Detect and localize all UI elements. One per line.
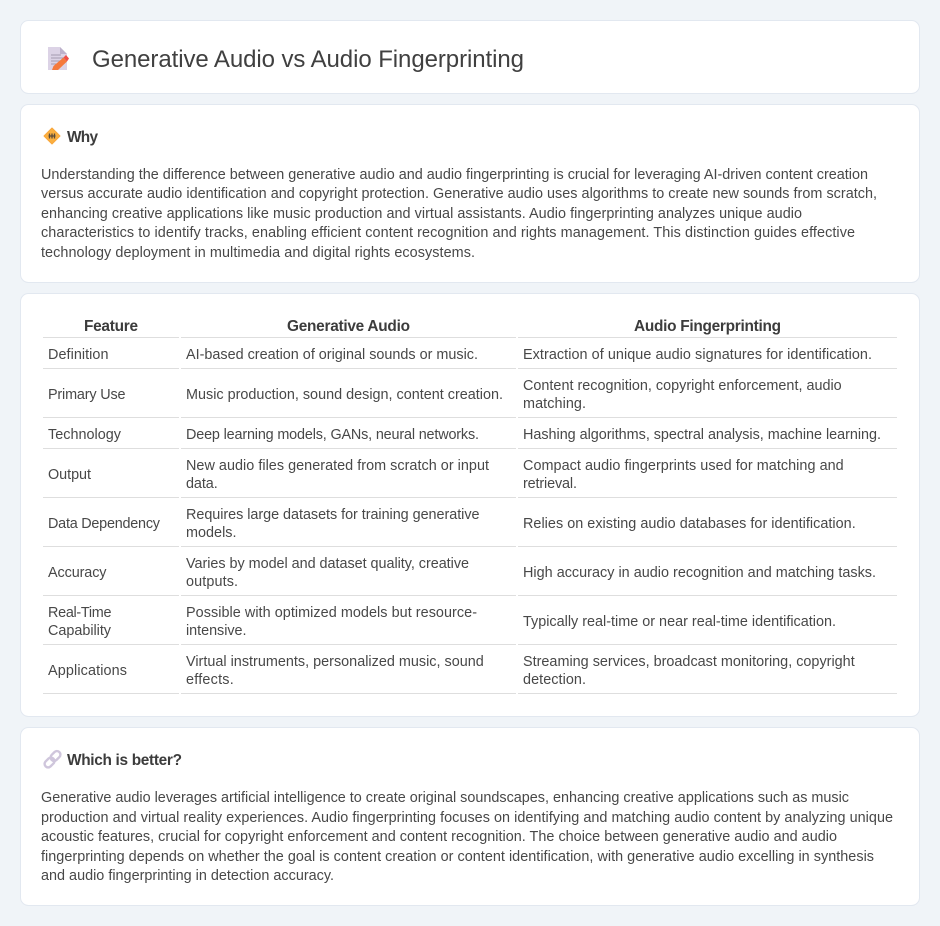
icon: link [43, 750, 62, 769]
row: data dependency: Requires large datasets for training generative [186, 507, 480, 523]
row: real-time capability: Real-Time [48, 605, 112, 621]
row: real-time capability: Possible with optimized models but resource- [186, 605, 477, 621]
row: real-time capability: Typically real-time or near real-time identification. [523, 614, 836, 630]
row: technology: Deep learning models, GANs, neural networks. [186, 427, 479, 443]
row: primary use: Music production, sound design, content creation. [186, 387, 503, 403]
row: output: data. [186, 476, 218, 492]
icon: warning diamond [44, 128, 60, 144]
heading: why: Why [67, 129, 98, 146]
row: data dependency [48, 507, 856, 541]
title: Generative Audio vs Audio Fingerprinting [92, 46, 524, 73]
row: real-time capability: Capability [48, 623, 112, 639]
icon: document with pencil [48, 47, 69, 70]
text block: which is better paragraph: acoustic features, crucial for copyright enforcement and content recognition. The choice between generative audio and audio [41, 829, 837, 845]
row: output: New audio files generated from scratch or input [186, 458, 489, 474]
panel: which is better [20, 728, 920, 906]
panel: comparison table [20, 294, 920, 716]
text block: why paragraph: characteristics to identify tracks, enabling efficient content recognition and rights management. This distinction guides effective [41, 225, 855, 241]
row: definition [48, 347, 872, 363]
row: applications: effects. [186, 672, 234, 688]
text block: which is better paragraph: and audio fingerprinting in detection accuracy. [41, 868, 334, 884]
row: accuracy: outputs. [186, 574, 238, 590]
row: output: Output [48, 467, 91, 483]
text block: which is better paragraph: production and virtual reality experiences. Audio fingerprinting focuses on identifying and matching audio content by analyzing unique [41, 810, 893, 826]
row: real-time capability: intensive. [186, 623, 246, 639]
table header row: Feature [84, 318, 138, 335]
text block: why paragraph: Understanding the difference between generative audio and audio fingerprinting is crucial for leveraging AI-driven content creation [41, 167, 868, 183]
row: applications: Virtual instruments, personalized music, sound [186, 654, 484, 670]
row: primary use: Content recognition, copyright enforcement, audio [523, 378, 842, 394]
row: output: Compact audio fingerprints used for matching and [523, 458, 844, 474]
table header row: Generative Audio [287, 318, 410, 335]
row: data dependency: Relies on existing audio databases for identification. [523, 516, 856, 532]
text block: which is better paragraph [41, 790, 893, 884]
heading: which is better: Which is better? [67, 752, 182, 769]
row: data dependency: models. [186, 525, 236, 541]
row: output [48, 458, 844, 492]
row: applications: Applications [48, 663, 127, 679]
row: output: retrieval. [523, 476, 577, 492]
text block: why paragraph: enhancing creative applications like music production and virtual assistants. Audio fingerprinting analyzes unique audio [41, 206, 802, 222]
row: technology: Hashing algorithms, spectral analysis, machine learning. [523, 427, 881, 443]
row: accuracy: High accuracy in audio recognition and matching tasks. [523, 565, 876, 581]
row: applications: detection. [523, 672, 586, 688]
panel: header [20, 20, 920, 94]
row: applications: Streaming services, broadcast monitoring, copyright [523, 654, 855, 670]
text block: why paragraph: technology deployment in multimedia and digital rights ecosystems. [41, 245, 475, 261]
row: definition: Definition [48, 347, 108, 363]
table header row: Audio Fingerprinting [634, 318, 781, 335]
row: primary use [48, 378, 842, 412]
row: real-time capability [48, 605, 836, 639]
table header row [84, 318, 781, 335]
row: primary use: Primary Use [48, 387, 126, 403]
row: accuracy: Varies by model and dataset quality, creative [186, 556, 469, 572]
row: data dependency: Data Dependency [48, 516, 161, 532]
row: technology: Technology [48, 427, 122, 443]
row: applications [48, 654, 855, 688]
row: primary use: matching. [523, 396, 586, 412]
row: definition: Extraction of unique audio signatures for identification. [523, 347, 872, 363]
row: accuracy [48, 556, 876, 590]
row: definition: AI-based creation of original sounds or music. [186, 347, 478, 363]
text block: why paragraph: versus accurate audio identification and copyright protection. Generative audio uses algorithms to create new sounds from scratch, [41, 186, 877, 202]
text block: which is better paragraph: Generative audio leverages artificial intelligence to create original soundscapes, enhancing creative applications such as music [41, 790, 849, 806]
text block: which is better paragraph: fingerprinting depends on whether the goal is content creation or content identification, with generative audio excelling in synthesis [41, 849, 874, 865]
row: accuracy: Accuracy [48, 565, 107, 581]
panel: why [20, 104, 920, 282]
text block: why paragraph [41, 167, 877, 261]
row: technology [48, 427, 881, 443]
